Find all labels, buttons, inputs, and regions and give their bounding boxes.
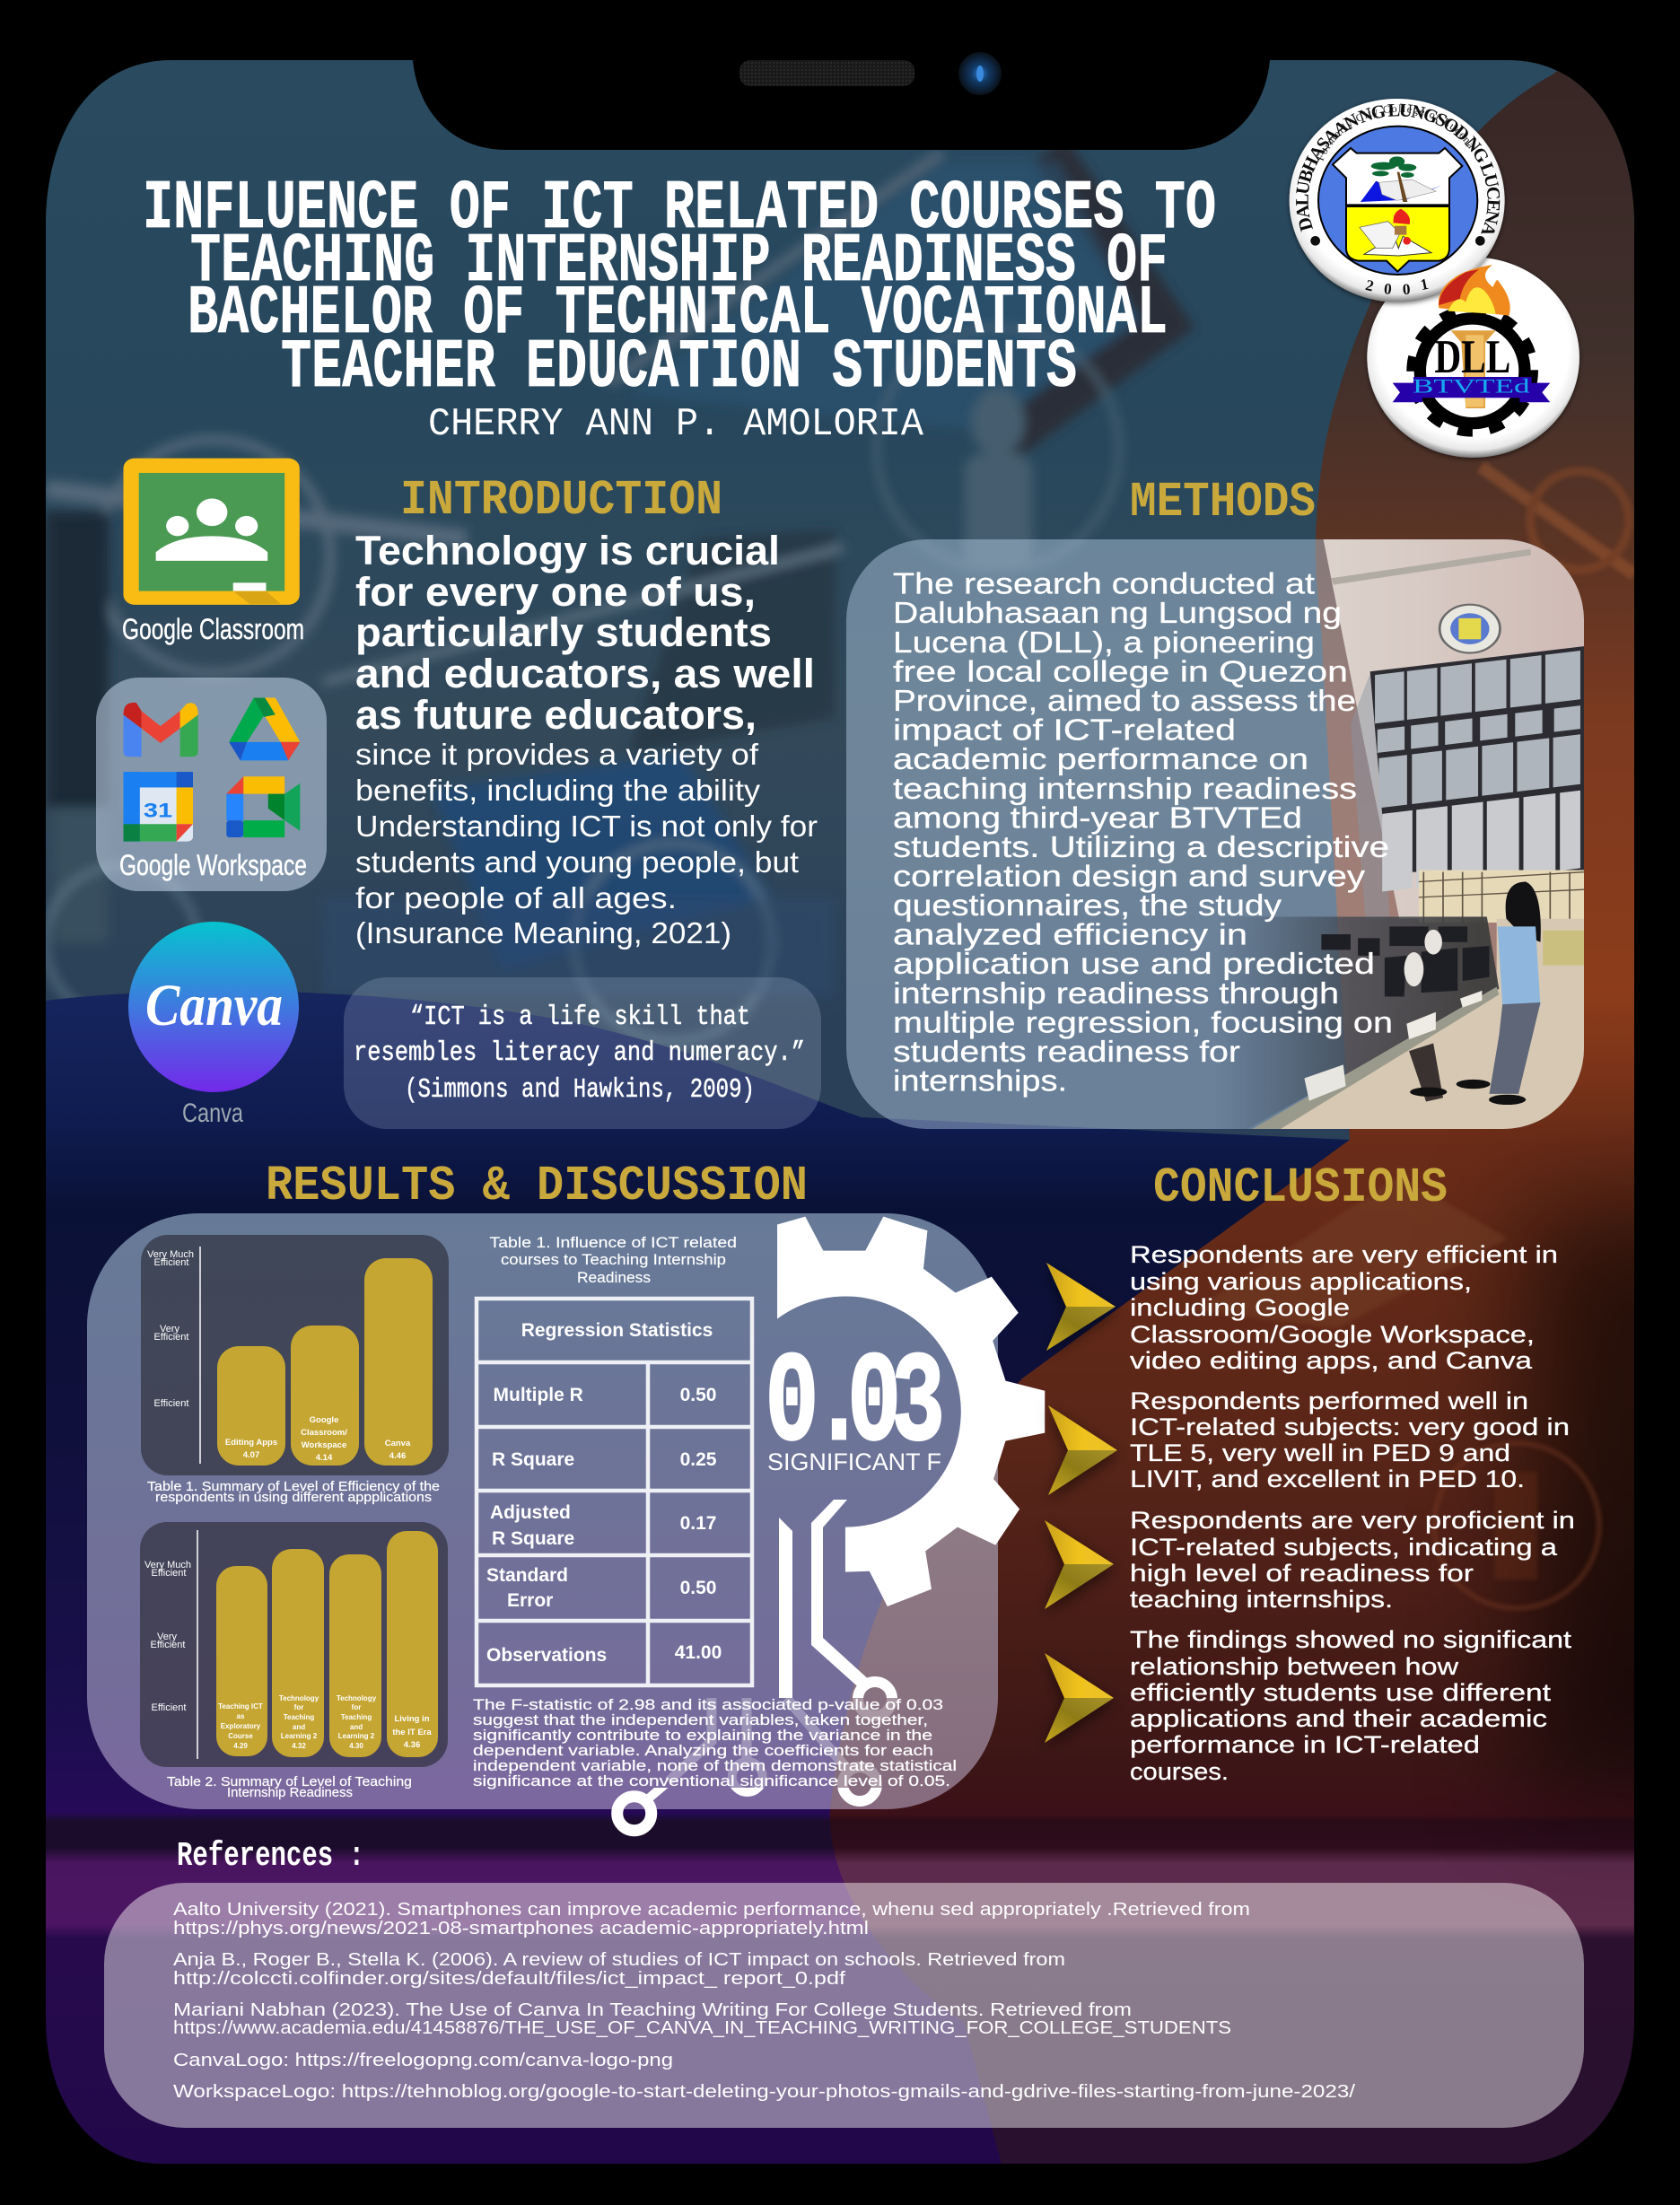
circuit traces, solid (617, 1500, 892, 1831)
caption: chart 1: respondents in using different appplications (155, 1490, 432, 1505)
panel: references (104, 1883, 1584, 2128)
chart: teaching internship readiness: Exploratory (221, 1722, 261, 1730)
title (143, 171, 1216, 407)
table: regression statistics: Multiple R (494, 1385, 583, 1405)
results paragraph: independent variable, none of them demonstrate statistical (473, 1757, 957, 1774)
conclusion 3 text: high level of readiness for (1130, 1560, 1474, 1587)
table: regression statistics: 0.25 (680, 1449, 717, 1470)
title: INFLUENCE OF ICT RELATED COURSES TO (143, 171, 1216, 249)
table: regression statistics: Error (507, 1590, 553, 1611)
intro body text: students and young people, but (355, 845, 799, 879)
logo: Dalubhasaan ng Lungsod ng Lucena seal: DALUBHASAAN NG LUNGSOD NG LUCENA (1296, 104, 1501, 234)
conclusion 2 text (1130, 1387, 1570, 1492)
methods text (893, 567, 1393, 1097)
conclusion 3 text: teaching internships. (1130, 1586, 1393, 1613)
methods text: teaching internship readiness (893, 772, 1357, 805)
chart: teaching internship readiness: and (293, 1723, 305, 1731)
table: regression statistics: 0.50 (680, 1578, 716, 1598)
chart: efficiency by application (141, 1235, 449, 1475)
table: regression statistics: R Square (492, 1528, 574, 1549)
intro body text: (Insurance Meaning, 2021) (355, 916, 731, 949)
intro body text: since it provides a variety of (355, 738, 759, 771)
intro emphasis text: particularly students (355, 609, 772, 655)
conclusion 2 text: ICT-related subjects: very good in (1130, 1413, 1570, 1440)
circuit traces, faded under text (666, 1698, 897, 1788)
title: BACHELOR OF TECHNICAL VOCATIONAL (188, 276, 1168, 354)
arrow: conclusion 3 (1045, 1520, 1114, 1609)
icon: Google Calendar (123, 772, 193, 842)
methods text: correlation design and survey (893, 860, 1366, 892)
chart: efficiency by application: 4.46 (389, 1451, 406, 1461)
logo: BTVTEd torch badge (1367, 258, 1579, 458)
panel: references: WorkspaceLogo: https://tehnoblog.org/google-to-start-deleting-your-photos-gmails-and-gdrive-files-starting-from-june-2023/ (173, 2082, 1356, 2102)
conclusion 3 text: Respondents are very proficient in (1130, 1507, 1575, 1534)
conclusion 4 text: The findings showed no significant (1130, 1626, 1572, 1653)
methods text: internships. (893, 1064, 1067, 1097)
quote text: resembles literacy and numeracy.” (354, 1037, 805, 1069)
label: significant F: SIGNIFICANT F (767, 1448, 941, 1475)
caption: chart 2: Table 2. Summary of Level of Teaching (167, 1774, 412, 1789)
chart: teaching internship readiness: the IT Era (392, 1728, 432, 1737)
conclusion 2 text: LIVIT, and excellent in PED 10. (1130, 1466, 1525, 1492)
chart: teaching internship readiness: 4.32 (292, 1742, 306, 1750)
intro emphasis text: as future educators, (355, 692, 757, 738)
title: TEACHER EDUCATION STUDENTS (281, 329, 1077, 407)
results paragraph: suggest that the independent variables, taken together, (473, 1711, 928, 1728)
conclusion 3 text (1130, 1507, 1575, 1613)
methods text: questionnaires, the study (893, 888, 1282, 922)
table caption: courses to Teaching Internship (501, 1251, 726, 1268)
icon: Canva logo: Canva (145, 973, 283, 1038)
icon: Google Drive (229, 697, 300, 760)
methods text: Dalubhasaan ng Lungsod ng (893, 596, 1342, 629)
results paragraph: dependent variable. Analyzing the coefficients for each (473, 1742, 933, 1759)
intro emphasis text: Technology is crucial (355, 528, 780, 573)
conclusion 3 text: ICT-related subjects, indicating a (1130, 1534, 1558, 1561)
chart: efficiency by application: Efficient (154, 1398, 188, 1409)
arrow: conclusion 1 (1046, 1263, 1116, 1351)
conclusion 1 text: using various applications, (1130, 1268, 1472, 1295)
chart: teaching internship readiness: for (352, 1703, 361, 1711)
caption: Google Classroom: Google Classroom (122, 613, 304, 645)
results paragraph: The F-statistic of 2.98 and its associated p-value of 0.03 (473, 1696, 943, 1713)
methods text: students readiness for (893, 1035, 1240, 1068)
conclusion 4 text: courses. (1130, 1758, 1229, 1785)
gear graphic: significant F (617, 1217, 1045, 1831)
quote text (354, 1002, 805, 1106)
icon: Google Calendar: 31 (144, 800, 172, 822)
methods text: Province, aimed to assess the (893, 684, 1356, 717)
intro body text: benefits, including the ability (355, 774, 761, 807)
conclusion 1 text: including Google (1130, 1294, 1350, 1321)
icon: Canva logo (128, 922, 299, 1092)
icon: Gmail (123, 703, 198, 757)
methods text: The research conducted at (893, 567, 1315, 599)
panel: Google Workspace (96, 678, 327, 891)
panel: methods with classroom photo (846, 529, 1597, 1140)
panel: references: https://www.academia.edu/41458876/THE_USE_OF_CANVA_IN_TEACHING_WRITING_FOR_COLLEGE_STUDENTS (173, 2018, 1231, 2038)
intro emphasis text: for every one of us, (355, 569, 756, 615)
caption: chart 1 (147, 1479, 440, 1505)
icon: Google Meet (226, 776, 300, 837)
conclusion 4 text: performance in ICT-related (1130, 1731, 1480, 1758)
chart: teaching internship readiness: Efficient (152, 1702, 186, 1713)
author: CHERRY ANN P. AMOLORIA (428, 402, 924, 447)
panel: references: https://phys.org/news/2021-08-smartphones academic-appropriately.html (173, 1919, 869, 1938)
intro emphasis text (355, 528, 815, 738)
panel: results and discussion (87, 1213, 998, 1809)
chart: teaching internship readiness: Very (157, 1632, 178, 1642)
conclusion 2 text: Respondents performed well in (1130, 1387, 1528, 1414)
arrow: conclusion 2 (1048, 1405, 1117, 1495)
table: regression statistics: R Square (492, 1449, 574, 1470)
chart: teaching internship readiness: Course (228, 1732, 253, 1740)
table caption: Readiness (577, 1269, 651, 1286)
chart: teaching internship readiness (140, 1522, 448, 1767)
chart: efficiency by application: Efficient (154, 1332, 188, 1343)
chart: teaching internship readiness: Technology (337, 1694, 377, 1702)
chart: efficiency by application: Editing Apps (225, 1438, 277, 1448)
quote text: “ICT is a life skill that (410, 1002, 750, 1033)
logo: Dalubhasaan ng Lungsod ng Lucena seal: 2001 (1364, 276, 1430, 298)
heading: results and discussion: RESULTS & DISCUSSION (266, 1158, 808, 1214)
notch camera (958, 52, 1002, 95)
conclusion 1 text: video editing apps, and Canva (1130, 1347, 1533, 1374)
conclusion 1 text: Classroom/Google Workspace, (1130, 1321, 1535, 1348)
table: regression statistics: 41.00 (675, 1642, 722, 1663)
chart: efficiency by application: Workspace (302, 1440, 346, 1450)
chart: efficiency by application: 4.14 (316, 1453, 333, 1463)
table: regression statistics: Adjusted (490, 1502, 571, 1523)
table: regression statistics: Observations (486, 1645, 607, 1666)
table: regression statistics (477, 1299, 752, 1687)
methods text: free local college in Quezon (893, 655, 1348, 687)
chart: efficiency by application: Canva (385, 1439, 411, 1448)
intro body text: for people of all ages. (355, 881, 677, 914)
icon: Google Classroom (123, 459, 300, 605)
results paragraph: significance at the conventional significance level of 0.05. (473, 1772, 950, 1789)
methods text: academic performance on (893, 742, 1308, 775)
methods text: internship readiness through (893, 976, 1339, 1010)
methods text: multiple regression, focusing on (893, 1005, 1393, 1039)
logo: Dalubhasaan ng Lungsod ng Lucena seal: Formerly City College of Lucena (1316, 104, 1473, 162)
icon: torch flame (1439, 265, 1510, 316)
panel: quote (344, 977, 821, 1129)
chart: teaching internship readiness: as (237, 1712, 245, 1720)
chart: teaching internship readiness: Teaching ICT (218, 1702, 263, 1711)
conclusion 1 text: Respondents are very efficient in (1130, 1241, 1558, 1268)
intro body text (355, 738, 818, 949)
caption: chart 1: Table 1. Summary of Level of Efficiency of the (147, 1479, 440, 1494)
intro emphasis text: and educators, as well (355, 651, 815, 696)
methods text: among third-year BTVTEd (893, 801, 1302, 835)
photo: computer laboratory (1214, 529, 1597, 1140)
table caption (490, 1234, 737, 1286)
heading: references: References : (177, 1837, 364, 1876)
chart: teaching internship readiness: 4.36 (404, 1740, 420, 1750)
chart: teaching internship readiness: Teaching (284, 1713, 314, 1721)
chart: efficiency by application: Google (310, 1415, 338, 1425)
methods text: application use and predicted (893, 947, 1375, 980)
conclusion 4 text (1130, 1626, 1572, 1785)
conclusion 4 text: relationship between how (1130, 1653, 1459, 1680)
conclusion 2 text: TLE 5, very well in PED 9 and (1130, 1439, 1510, 1466)
results paragraph: significantly contribute to explaining the variance in the (473, 1727, 932, 1744)
table caption: Table 1. Influence of ICT related (490, 1234, 737, 1251)
panel: references: Aalto University (2021). Smartphones can improve academic performance, whenu sed appropriately .Retrieved from (173, 1900, 1250, 1920)
chart: teaching internship readiness: and (350, 1723, 363, 1731)
chart: efficiency by application: Very (160, 1324, 180, 1334)
conclusion 4 text: applications and their academic (1130, 1705, 1547, 1732)
panel: references: CanvaLogo: https://freelogopng.com/canva-logo-png (173, 2051, 673, 2070)
table: regression statistics: 0.17 (680, 1513, 716, 1534)
logo: BTVTEd torch badge: DLL (1434, 329, 1510, 383)
chart: teaching internship readiness: Very Much (144, 1560, 191, 1571)
chart: teaching internship readiness: for (294, 1703, 303, 1711)
heading: methods: METHODS (1130, 474, 1316, 530)
caption: chart 2: Internship Readiness (227, 1785, 353, 1800)
chart: teaching internship readiness: 4.30 (349, 1742, 363, 1750)
conclusion 4 text: efficiently students use different (1130, 1679, 1552, 1706)
logo: BTVTEd torch badge: BTVTEd (1413, 375, 1530, 398)
methods text: Lucena (DLL), a pioneering (893, 626, 1315, 659)
table: regression statistics: Regression Statistics (521, 1320, 713, 1341)
chart: efficiency by application: Classroom/ (301, 1428, 347, 1438)
conclusion 1 text (1130, 1241, 1558, 1374)
table: regression statistics: 0.50 (680, 1385, 716, 1405)
methods text: analyzed efficiency in (893, 917, 1247, 951)
notch speaker (739, 60, 914, 86)
logo: Dalubhasaan ng Lungsod ng Lucena seal (1287, 98, 1506, 307)
table: regression statistics: Standard (486, 1565, 568, 1586)
quote text: (Simmons and Hawkins, 2009) (405, 1074, 755, 1106)
chart: teaching internship readiness: Teaching (341, 1713, 372, 1721)
chart: teaching internship readiness: Learning 2 (281, 1732, 318, 1740)
chart: teaching internship readiness: 4.29 (233, 1742, 248, 1750)
chart: efficiency by application: Very Much (147, 1249, 194, 1260)
methods text: students. Utilizing a descriptive (893, 830, 1389, 863)
value: 0.03: 0.03 (766, 1333, 945, 1477)
chart: teaching internship readiness: Learning 2 (338, 1732, 375, 1740)
intro body text: Understanding ICT is not only for (355, 809, 818, 843)
heading: conclusions: CONCLUSIONS (1153, 1159, 1448, 1216)
chart: teaching internship readiness: Efficient (152, 1568, 186, 1579)
caption: Google Workspace: Google Workspace (119, 849, 307, 881)
panel: references: http://colccti.colfinder.org/sites/default/files/ict_impact_ report_0.pdf (173, 1969, 846, 1989)
title: TEACHING INTERNSHIP READINESS OF (190, 223, 1168, 302)
panel: references: Mariani Nabhan (2023). The Use of Canva In Teaching Writing For College Students. Retrieved from (173, 2000, 1132, 2020)
panel: references: Anja B., Roger B., Stella K. (2006). A review of studies of ICT impact on schools. Retrieved from (173, 1950, 1065, 1970)
chart: efficiency by application: 4.07 (243, 1450, 259, 1460)
methods text: impact of ICT-related (893, 713, 1236, 747)
caption: Canva: Canva (182, 1098, 243, 1128)
caption: chart 2 (167, 1774, 412, 1800)
chart: teaching internship readiness: Technology (279, 1694, 319, 1702)
chart: efficiency by application: Efficient (154, 1257, 188, 1268)
arrow: conclusion 4 (1045, 1653, 1114, 1743)
results paragraph (473, 1696, 957, 1789)
chart: teaching internship readiness: Efficient (151, 1640, 185, 1650)
chart: teaching internship readiness: Living in (394, 1714, 430, 1724)
heading: introduction: INTRODUCTION (400, 472, 722, 529)
